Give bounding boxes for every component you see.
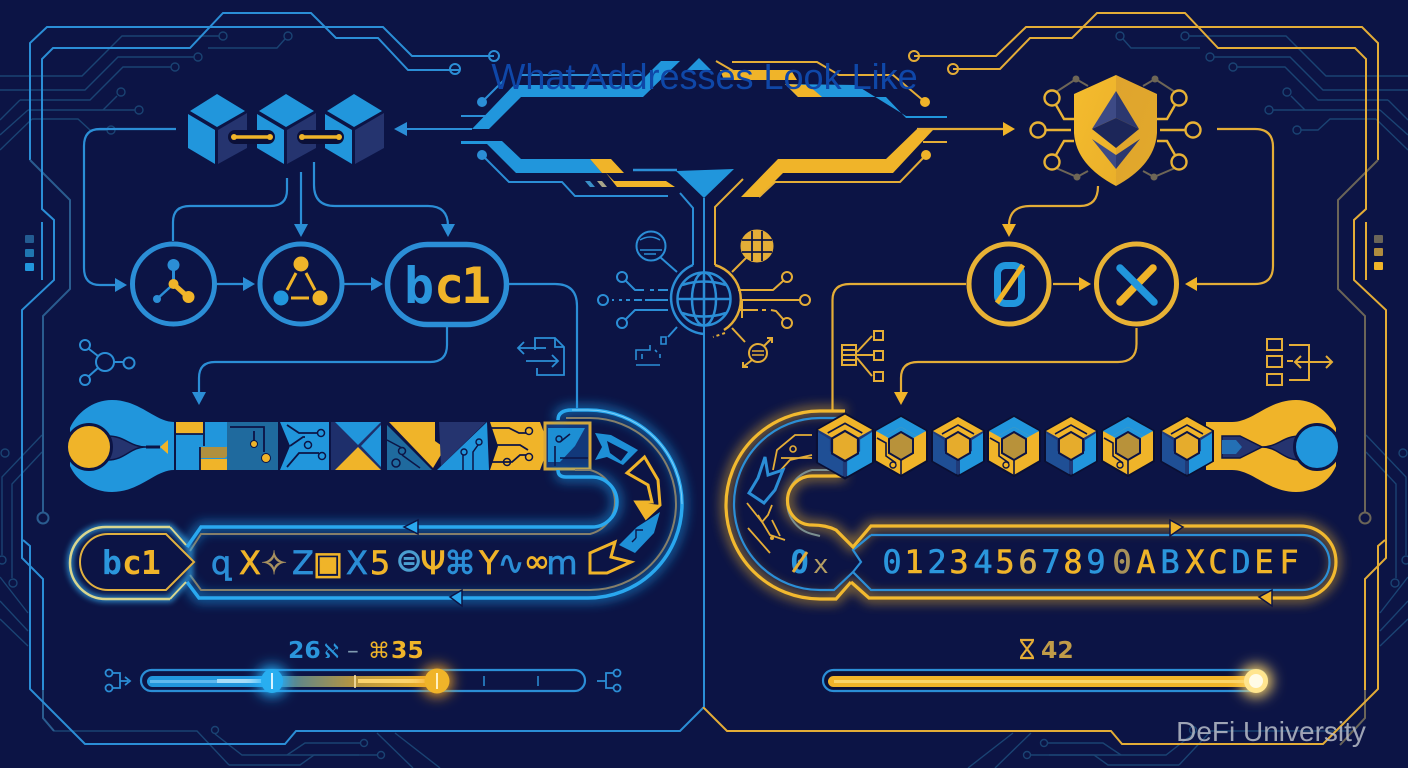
arrow: tube bottom [450, 590, 462, 606]
right length bar [823, 665, 1272, 697]
blue spokes [598, 232, 677, 365]
tile 4 [331, 422, 381, 470]
left stat label: – [347, 636, 359, 664]
bc1 address glyphs: ⊜ [396, 541, 422, 579]
arc circuit icons [747, 435, 812, 553]
bc1 address glyphs: Z [292, 544, 314, 582]
node circle: zero [969, 244, 1049, 324]
left stat label: 26 [288, 636, 321, 664]
tile 2 [227, 422, 278, 470]
chevron segments [590, 433, 660, 573]
hexagon chain [817, 414, 1213, 478]
bc1 address glyphs [211, 541, 578, 582]
left key with coloured tiles [66, 400, 590, 492]
tile 1 [176, 422, 237, 470]
bc1 address glyphs: ▣ [313, 544, 343, 582]
tile 6 [437, 422, 489, 470]
right status squares [1374, 235, 1383, 270]
arrow: tube top [404, 520, 418, 534]
node pill: bc1: 1 [461, 257, 491, 315]
title: What Addresses Look Like [491, 56, 918, 97]
icon: molecule [80, 340, 134, 385]
arrow: banner to cubes [394, 122, 407, 136]
hex address characters: B [1160, 543, 1180, 581]
tile 5 [387, 422, 445, 470]
gold knob [422, 666, 452, 696]
hex address characters: E [1254, 543, 1274, 581]
icon: ethereum shield [1030, 75, 1200, 186]
arrow: tube bottom [1259, 590, 1272, 606]
hex address characters: X [1185, 543, 1205, 581]
bc1 prefix tag: b [102, 543, 122, 582]
bc1 address glyphs: X [239, 544, 261, 582]
hex address characters: 6 [1018, 543, 1038, 581]
icon: blockchain cubes [188, 94, 384, 164]
bc1 address glyphs: զ [211, 544, 232, 582]
hex address characters: 5 [995, 543, 1015, 581]
bc1 address glyphs: X [346, 544, 368, 582]
node circle: triangle network [260, 244, 342, 324]
hex address characters: 0 [882, 543, 902, 581]
node pill: bc1: c [434, 257, 464, 315]
hex address characters: 1 [904, 543, 924, 581]
right tube: glowing address track [726, 411, 1336, 606]
tile 8 [545, 423, 590, 469]
bc1 address glyphs: Y [478, 544, 499, 582]
hex address characters: 2 [927, 543, 947, 581]
bc1 prefix tag: c [122, 543, 142, 582]
right key with hexagon chain [1206, 400, 1340, 492]
hex address characters: 4 [973, 543, 993, 581]
left frame traces [22, 13, 704, 744]
left stat label: ⌘ [368, 639, 390, 664]
hex address characters: 8 [1063, 543, 1083, 581]
hex address characters: 7 [1041, 543, 1061, 581]
hex address characters: C [1208, 543, 1228, 581]
icon: file transfer [518, 338, 564, 375]
hex address characters: F [1279, 543, 1299, 581]
watermark: DeFi University [1176, 716, 1366, 747]
blue knob [257, 666, 287, 696]
node pill: bc1 [388, 244, 506, 324]
left length bar [141, 666, 585, 696]
left tube: glowing address track [187, 410, 682, 606]
0x prefix [790, 543, 829, 581]
arrows: blue flow lines [84, 129, 577, 408]
bc1 prefix tag [70, 527, 194, 599]
right stat label: 42 [1041, 636, 1074, 664]
hex address characters: 3 [949, 543, 969, 581]
icon: data tree [842, 331, 883, 381]
tile 7 [490, 422, 549, 470]
hex address characters: A [1136, 543, 1156, 581]
bc1 address glyphs: Ψ [420, 544, 446, 582]
bc1 address glyphs: ✧ [261, 544, 287, 582]
central divider line [703, 198, 705, 707]
icon: grid exchange [1267, 339, 1332, 385]
hex address characters: 9 [1086, 543, 1106, 581]
right frame traces [703, 13, 1386, 745]
hex address characters: D [1231, 543, 1251, 581]
hex address characters [882, 543, 1299, 581]
left stat label: 35 [391, 636, 424, 664]
0x prefix: x [813, 550, 829, 580]
hub: central globe [598, 230, 810, 707]
icon: left bar start [106, 670, 130, 692]
left stat label: ℵ [324, 639, 339, 663]
bc1 address glyphs: m [546, 544, 578, 582]
arrow: tube top [1170, 520, 1183, 536]
top centre circuit banner [407, 58, 947, 265]
glowing knob [1240, 665, 1272, 697]
hex address characters: 0 [1112, 543, 1132, 581]
node circle: branching key [132, 244, 214, 324]
icon: left bar end [597, 670, 620, 692]
gold spokes [713, 230, 810, 367]
left stat label [288, 636, 424, 664]
bc1 address glyphs: ⌘ [444, 544, 476, 582]
left status squares [25, 235, 34, 271]
arrows: gold flow lines [832, 122, 1273, 411]
0x prefix: 0 [790, 543, 809, 581]
node circle: x [1096, 244, 1176, 324]
bc1 prefix tag: 1 [141, 543, 161, 582]
node pill: bc1: b [404, 257, 434, 315]
bc1 address glyphs: 5 [370, 544, 390, 582]
bc1 address glyphs: ∞ [524, 542, 550, 580]
right stat label [1020, 636, 1074, 664]
tile 3 [280, 422, 329, 470]
bc1 address glyphs: ∿ [498, 544, 524, 582]
